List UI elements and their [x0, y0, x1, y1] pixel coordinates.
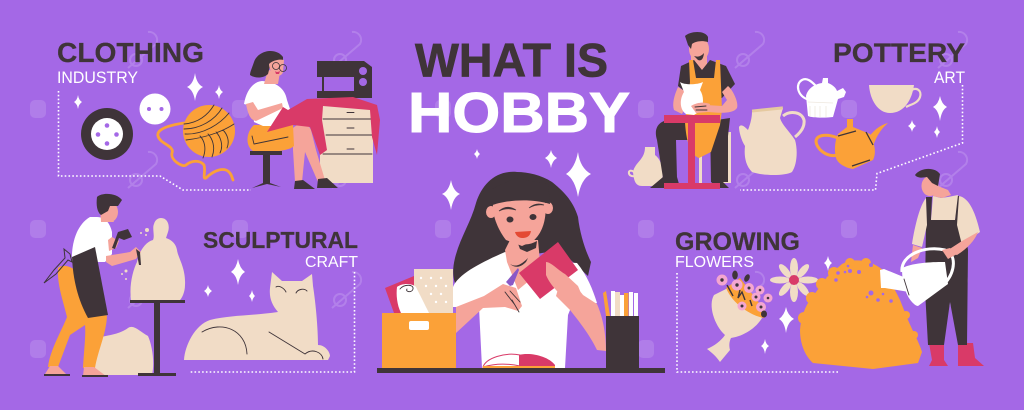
title line 1: WHAT IS [415, 34, 608, 86]
illustration: bouquet [707, 270, 772, 362]
illustration: pencil holder [603, 291, 639, 368]
panel: clothing industry [57, 37, 380, 190]
dotted frame [677, 273, 840, 372]
illustration: woman hair [453, 172, 591, 285]
icon: sparkles [908, 96, 947, 138]
title line 2: HOBBY [408, 81, 630, 145]
icon: white button [140, 94, 170, 124]
illustration: orange bush [798, 258, 922, 369]
dotted frame [190, 272, 354, 372]
subheading: flowers: FLOWERS [675, 254, 754, 271]
illustration: cup [869, 85, 920, 113]
illustration: orange teapot [816, 119, 888, 169]
icon: flower [770, 258, 818, 302]
icon: yarn ball [158, 105, 235, 180]
illustration: stone block [93, 327, 153, 375]
illustration: woman face [486, 178, 553, 246]
panel: pottery art [629, 32, 965, 190]
table top [377, 368, 665, 373]
illustration: potter [650, 32, 737, 189]
heading: clothing: CLOTHING [57, 37, 204, 68]
panel: sculptural craft [44, 194, 358, 377]
illustration: sculptor [44, 194, 149, 377]
illustration: open book [483, 354, 555, 368]
illustration: cat statue [184, 272, 330, 360]
icon: sparkles [761, 256, 832, 354]
illustration: red notebook [519, 242, 578, 299]
icon: sparkles [74, 73, 223, 109]
icon: scissors [506, 268, 519, 286]
illustration: orange box [382, 313, 456, 368]
illustration: gardener [880, 169, 984, 366]
illustration: sewing machine [317, 61, 372, 98]
icon: sparkles [442, 149, 591, 210]
panel: growing flowers [675, 169, 984, 372]
title: what is hobby [408, 34, 630, 145]
dotted frame [740, 85, 962, 190]
heading: sculptural: SCULPTURAL [203, 227, 358, 253]
subheading: industry: INDUSTRY [57, 69, 138, 87]
illustration: white teapot [798, 78, 846, 118]
illustration: woman body [453, 240, 606, 368]
subheading: craft: CRAFT [305, 254, 358, 271]
icon: dark button [81, 108, 133, 160]
heading: growing: GROWING [675, 228, 800, 256]
heading: pottery: POTTERY [833, 38, 965, 68]
icon: sparkles [204, 259, 255, 302]
illustration: red cloth [267, 97, 380, 155]
illustration: sculpture on stand [130, 218, 185, 376]
dotted frame [58, 91, 251, 190]
illustration: drawer cabinet [320, 105, 373, 183]
illustration: paper stack [385, 269, 453, 313]
illustration: right hand [546, 262, 583, 300]
subheading: art: ART [934, 69, 965, 87]
illustration: sewing woman [244, 51, 338, 189]
panel: central woman crafting [377, 149, 665, 373]
illustration: small jug [629, 147, 663, 186]
illustration: big jug [739, 106, 804, 175]
